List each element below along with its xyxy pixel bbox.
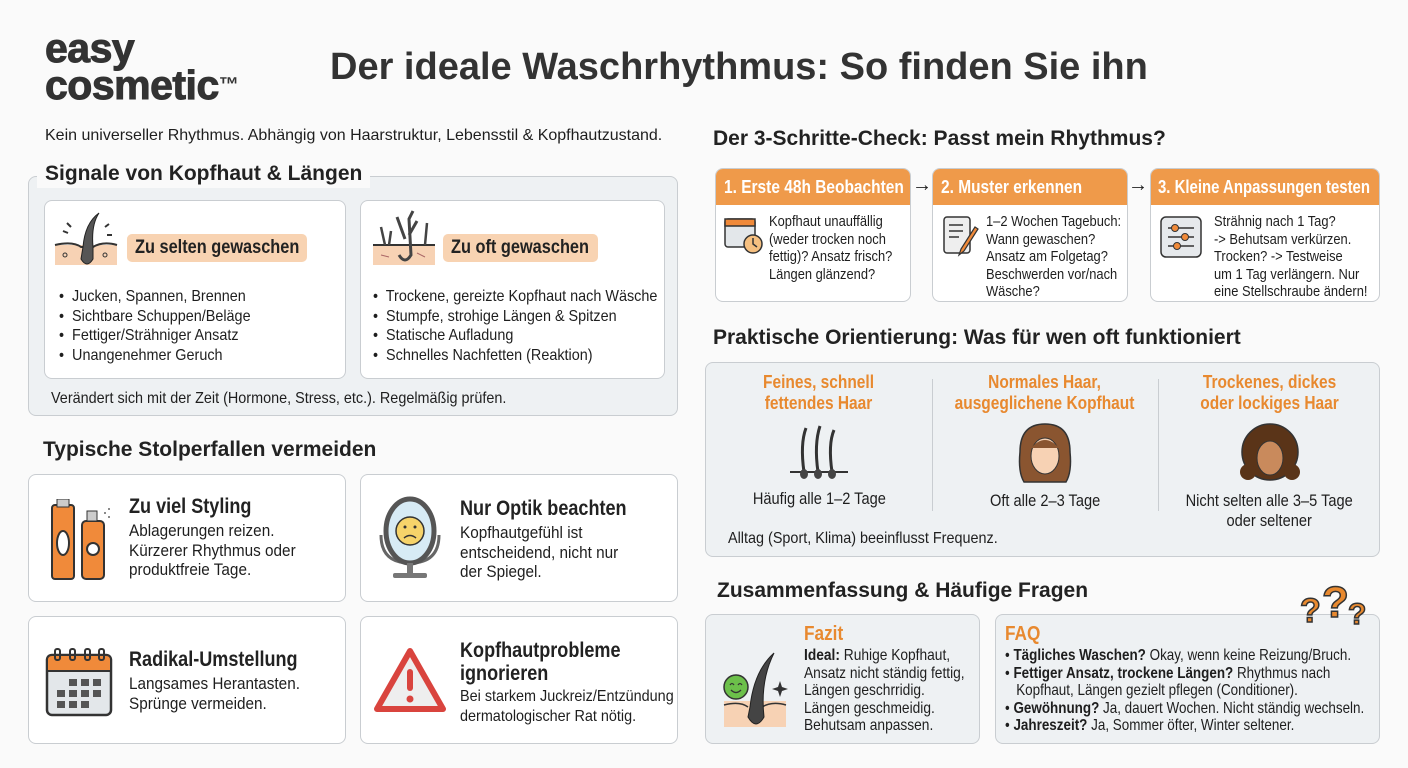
text: optics: [460, 497, 627, 581]
card: scalp problems: [360, 616, 678, 744]
icon: curly hair face: [1240, 423, 1300, 481]
card: too often: [360, 200, 665, 379]
text: fazit: Längen geschrridig.: [804, 682, 925, 699]
icon: sliders: [1160, 216, 1202, 258]
step 1: Kopfhaut unauffällig: [769, 213, 883, 230]
column: fine hair: Feines, schnell: [764, 372, 874, 392]
heading: orientation: Praktische Orientierung: Was für wen oft funktioniert: [713, 326, 1241, 349]
column: fine hair: fettendes Haar: [765, 393, 873, 413]
text: faq: Kopfhaut, Längen gezielt pflegen (Conditioner).: [1016, 682, 1298, 699]
step 3: [1150, 168, 1380, 302]
label: too rarely: [127, 234, 307, 262]
step 1: [715, 168, 911, 302]
text: optics: Kopfhautgefühl ist: [460, 523, 582, 542]
icon: calendar clock: [724, 218, 763, 254]
text: styling: [129, 495, 296, 579]
panel: orientation: [705, 362, 1380, 557]
column: dry curly hair: Nicht selten alle 3–5 Tage: [1186, 491, 1353, 510]
text: optics: der Spiegel.: [460, 562, 542, 581]
icon: dry hair: [373, 210, 435, 265]
step 3: -> Behutsam verkürzen.: [1214, 230, 1351, 248]
heading: pitfalls: Typische Stolperfallen vermeiden: [43, 438, 376, 461]
logo: easy: [45, 25, 134, 71]
text: styling: produktfreie Tage.: [129, 560, 251, 579]
list: too rarely: • Unangenehmer Geruch: [59, 346, 223, 364]
text: scalp problems: dermatologischer Rat nötig.: [460, 708, 636, 724]
text: fazit: Ideal: Ruhige Kopfhaut,: [804, 647, 950, 664]
list: too often: • Schnelles Nachfetten (Reaktion): [373, 346, 593, 364]
list: too often: • Stumpfe, strohige Längen & Spitzen: [373, 308, 617, 324]
step 2: Ansatz am Folgetag?: [986, 248, 1108, 265]
list: too often: • Trockene, gereizte Kopfhaut nach Wäsche: [373, 288, 657, 305]
text: styling: Kürzerer Rhythmus oder: [129, 540, 296, 560]
column: dry curly hair: oder seltener: [1227, 511, 1312, 530]
column: normal hair: ausgeglichene Kopfhaut: [955, 393, 1135, 413]
text: styling: Zu viel Styling: [129, 495, 251, 518]
subtitle: Kein universeller Rhythmus. Abhängig von Haarstruktur, Lebensstil & Kopfhautzustand.: [45, 127, 662, 144]
note: changes over time: Verändert sich mit der Zeit (Hormone, Stress, etc.). Regelmäßig prüfen.: [51, 390, 506, 407]
icon: warning: [374, 648, 446, 712]
heading: signals: Signale von Kopfhaut & Längen: [45, 162, 362, 185]
step 2: Wann gewaschen?: [986, 230, 1095, 248]
label: too often: Zu oft gewaschen: [451, 237, 589, 258]
column: normal hair: [955, 372, 1135, 510]
logo: [45, 25, 238, 108]
text: fazit: Ansatz nicht ständig fettig,: [804, 664, 965, 682]
text: scalp problems: Kopfhautprobleme: [460, 639, 621, 662]
text: faq: FAQ: [1005, 623, 1040, 645]
label: too rarely: Zu selten gewaschen: [135, 237, 299, 258]
arrow: →: [1128, 174, 1148, 196]
icon: fine strands: [790, 426, 848, 479]
list: too rarely: • Sichtbare Schuppen/Beläge: [59, 308, 251, 324]
text: faq: • Tägliches Waschen? Okay, wenn keine Reizung/Bruch.: [1005, 647, 1351, 664]
column: dry curly hair: [1186, 372, 1353, 530]
card: optics: [360, 474, 678, 602]
column: dry curly hair: Trockenes, dickes: [1203, 372, 1336, 392]
heading: summary: Zusammenfassung & Häufige Fragen: [717, 579, 1088, 602]
icon: happy hair: [723, 652, 788, 727]
card: radical: [28, 616, 346, 744]
text: scalp problems: Bei starkem Juckreiz/Entzündung: [460, 688, 674, 705]
icon: notebook: [943, 216, 979, 257]
list: too rarely: • Jucken, Spannen, Brennen: [59, 288, 246, 305]
icon: question marks: ?: [1300, 592, 1321, 630]
text: fazit: Behutsam anpassen.: [804, 717, 933, 734]
icon: wavy hair face: [1018, 423, 1072, 483]
step 1: (weder trocken noch: [769, 230, 886, 248]
icon: question marks: ?: [1348, 598, 1366, 631]
icon: calendar: [46, 648, 112, 716]
logo: cosmetic™: [45, 62, 238, 108]
icon: question marks: [1300, 578, 1366, 631]
list: too often: [373, 288, 657, 364]
text: radical: [129, 648, 300, 712]
step 3: Trocken? -> Testweise: [1214, 248, 1343, 265]
step 1: Längen glänzend?: [769, 266, 875, 282]
arrow: →: [912, 174, 932, 196]
column: fine hair: Häufig alle 1–2 Tage: [752, 489, 886, 508]
column: fine hair: [752, 372, 886, 508]
text: optics: entscheidend, nicht nur: [460, 542, 618, 562]
icon: sprays: [51, 499, 110, 580]
text: faq: • Gewöhnung? Ja, dauert Wochen. Nicht ständig wechseln.: [1005, 700, 1364, 716]
text: faq: • Jahreszeit? Ja, Sommer öfter, Winter seltener.: [1005, 717, 1294, 734]
column: dry curly hair: oder lockiges Haar: [1200, 393, 1339, 413]
step 3: 3. Kleine Anpassungen testen: [1158, 177, 1370, 197]
text: radical: Sprünge vermeiden.: [129, 694, 267, 712]
panel: signals: [28, 176, 678, 416]
text: radical: Radikal-Umstellung: [129, 648, 298, 671]
step 3: um 1 Tag verlängern. Nur: [1214, 266, 1359, 282]
panel: faq: [995, 614, 1380, 744]
step 1: 1. Erste 48h Beobachten: [724, 177, 904, 197]
step 2: [932, 168, 1128, 302]
card: too rarely: [44, 200, 346, 379]
icon: oily hair: [54, 212, 118, 265]
list: too often: • Statische Aufladung: [373, 327, 513, 344]
list: too rarely: • Fettiger/Strähniger Ansatz: [59, 327, 239, 344]
text: styling: Ablagerungen reizen.: [129, 521, 274, 540]
step 2: Beschwerden vor/nach: [986, 266, 1117, 282]
note: daily life: Alltag (Sport, Klima) beeinflusst Frequenz.: [728, 530, 998, 547]
text: fazit: Fazit: [804, 623, 843, 645]
text: faq: • Fettiger Ansatz, trockene Längen? Rhythmus nach: [1005, 664, 1330, 682]
column: normal hair: Normales Haar,: [989, 372, 1101, 392]
heading: 3 step check: Der 3-Schritte-Check: Passt mein Rhythmus?: [713, 127, 1166, 150]
card: styling: [28, 474, 346, 602]
text: faq: [1005, 623, 1364, 734]
step 3: eine Stellschraube ändern!: [1214, 283, 1367, 300]
step 2: 2. Muster erkennen: [941, 177, 1082, 197]
step 2: 1–2 Wochen Tagebuch:: [986, 213, 1121, 230]
column: normal hair: Oft alle 2–3 Tage: [990, 491, 1100, 510]
step 3: Strähnig nach 1 Tag?: [1214, 213, 1336, 230]
icon: mirror: [380, 496, 440, 578]
step 1: fettig)? Ansatz frisch?: [769, 248, 892, 265]
text: fazit: Längen geschmeidig.: [804, 700, 935, 716]
title: Der ideale Waschrhythmus: So finden Sie ihn: [330, 46, 1148, 88]
icon: question marks: ?: [1322, 578, 1349, 627]
text: fazit: [804, 623, 965, 734]
label: too often: [443, 234, 598, 262]
text: optics: Nur Optik beachten: [460, 497, 627, 520]
text: radical: Langsames Herantasten.: [129, 674, 300, 693]
text: scalp problems: [460, 639, 674, 724]
panel: fazit: [705, 614, 980, 744]
text: scalp problems: ignorieren: [460, 662, 548, 685]
step 2: Wäsche?: [986, 283, 1040, 300]
list: too rarely: [59, 288, 251, 364]
